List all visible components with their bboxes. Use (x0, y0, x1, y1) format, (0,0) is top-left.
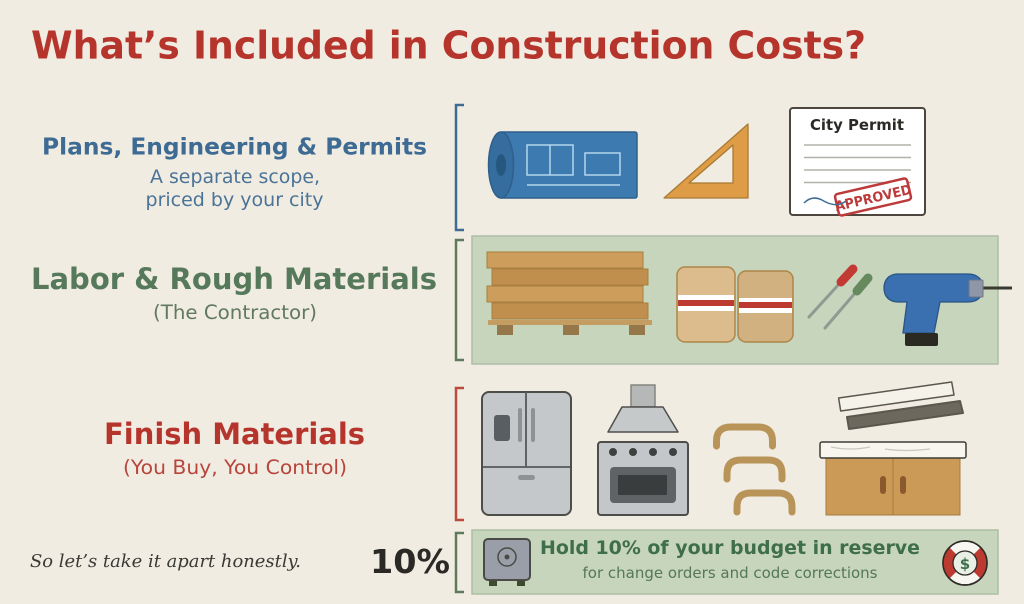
icon: power drill (884, 274, 1012, 346)
icon: screwdrivers (809, 269, 868, 328)
icon: life ring with dollar (943, 541, 987, 585)
text block: labor and rough materials (31, 262, 437, 324)
title: What’s Included in Construction Costs? (31, 24, 866, 68)
icon: blueprint roll (488, 132, 637, 198)
icon: cabinet pulls (716, 427, 792, 512)
text block: finish materials: Finish Materials (104, 417, 365, 451)
icon: set square (664, 124, 748, 198)
panel: reserve callout (472, 530, 998, 594)
text block: reserve message: Hold 10% of your budget in reserve (540, 537, 920, 559)
text block: labor and rough materials: Labor & Rough Materials (31, 262, 437, 296)
text block: finish materials: (You Buy, You Control) (123, 456, 347, 479)
text block: plans, engineering and permits (42, 134, 427, 211)
icon: stove and oven (598, 442, 688, 515)
text block: plans, engineering and permits: Plans, Engineering & Permits (42, 134, 427, 160)
icon: lumber pallet (487, 252, 652, 335)
icon: material bags (677, 267, 793, 342)
big number: 10%: 10% (370, 542, 450, 581)
text: closing line: So let’s take it apart honestly. (30, 551, 301, 572)
icon: safe (484, 539, 530, 586)
icon: city permit document: APPROVED (834, 182, 913, 215)
icon: stone slabs (839, 382, 963, 429)
text block: reserve message: for change orders and code corrections (582, 564, 878, 582)
text block: reserve message (540, 537, 920, 582)
icon: range hood (608, 385, 678, 432)
bracket: reserve (456, 533, 464, 592)
text block: plans, engineering and permits: priced by your city (146, 189, 324, 211)
bracket: plans (456, 105, 464, 230)
icon: refrigerator (482, 392, 571, 515)
icon: city permit document (790, 108, 925, 216)
icon: life ring with dollar: $ (960, 555, 970, 573)
icon: base cabinet with countertop (820, 442, 966, 515)
bracket: labor (456, 240, 464, 360)
text block: plans, engineering and permits: A separate scope, (150, 166, 320, 188)
panel: labor and rough materials (472, 236, 998, 364)
text block: labor and rough materials: (The Contractor) (153, 301, 317, 324)
text block: finish materials (104, 417, 365, 479)
icon: city permit document: City Permit (810, 116, 904, 134)
bracket: finish (456, 388, 464, 520)
